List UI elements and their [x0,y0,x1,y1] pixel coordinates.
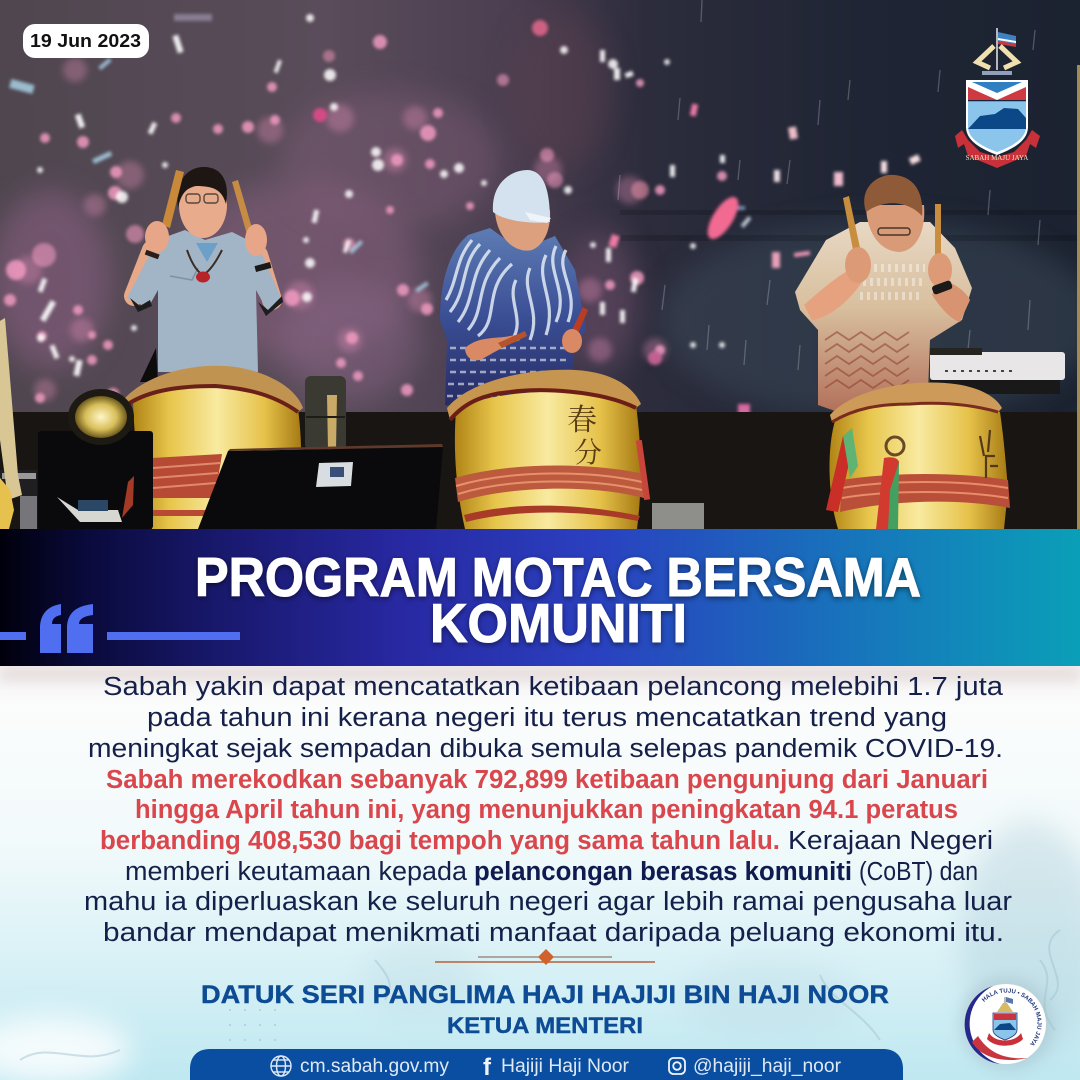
footer bar with contacts: Hajiji Haji Noor [501,1056,630,1077]
date badge: 19 Jun 2023 [30,30,141,51]
signatory name and title [201,981,889,1038]
icon: instagram [669,1058,685,1074]
body text: bandar mendapat menikmati manfaat daripada peluang ekonomi itu. [103,919,1004,947]
title: PROGRAM MOTAC BERSAMA [195,546,921,608]
body text [84,673,1013,947]
icon: Sabah coat of arms: SABAH MAJU JAYA [966,154,1028,162]
body text: Kerajaan Negeri [788,827,993,855]
photo: drum ceremony on stage [0,0,1080,529]
thin rain streaks on screen [617,0,1041,370]
arms [134,250,272,300]
date badge [23,24,149,58]
body text: mahu ia diperluaskan ke seluruh negeri agar lebih ramai pengusaha luar [84,888,1013,916]
body text: Sabah yakin dapat mencatatkan ketibaan pelancong melebihi 1.7 juta [103,673,1004,701]
laptop back [198,444,443,529]
icon: globe [271,1056,291,1076]
icon: Sabah coat of arms [955,28,1040,168]
guitar [0,318,37,529]
guitar case [305,376,346,450]
lower panel background with water splash [0,666,1080,1080]
title [195,546,921,654]
body text: pada tahun ini kerana negeri itu terus mencatatkan trend yang [147,704,947,732]
body text: memberi keutamaan kepada [125,858,468,886]
middle drum with characters: 春 [567,404,597,437]
right edge strip [1077,65,1080,529]
stage base [0,412,1080,529]
right man: batik shirt, head bowed [795,175,972,412]
highlighted statistics: hingga April tahun ini, yang menunjukkan peningkatan 94.1 peratus [135,796,958,824]
step block [652,503,704,529]
middle drum with characters: 分 [574,437,602,468]
stage light [38,389,153,529]
signatory name and title: DATUK SERI PANGLIMA HAJI HAJIJI BIN HAJI NOOR [201,981,889,1009]
footer bar with contacts: @hajiji_haji_noor [693,1056,842,1077]
ornamental divider [435,949,655,965]
title banner [0,529,1080,666]
highlighted statistics [100,766,988,855]
music stand [140,348,158,382]
body text: (CoBT) dan [859,858,978,886]
highlighted statistics: berbanding 408,530 bagi tempoh yang sama tahun lalu. [100,827,780,855]
middle man: blue batik and cap [440,170,588,410]
soft bokeh layer [14,58,667,401]
footer bar with contacts: cm.sabah.gov.my [300,1056,450,1077]
left drum [125,366,303,529]
icon: quotation mark [0,604,240,653]
title: KOMUNITI [430,592,687,654]
emblem: Hala Tuju seal [958,978,1052,1072]
body text: meningkat sejak sempadan dibuka semula selepas pandemik COVID-19. [88,735,1003,763]
signatory name and title: KETUA MENTERI [447,1013,643,1038]
body text: pelancongan berasas komuniti [474,858,852,886]
confetti bokeh [4,14,921,416]
highlighted statistics: Sabah merekodkan sebanyak 792,899 ketibaan pengunjung dari Januari [106,766,988,794]
middle drum with characters [447,370,650,529]
right drum with tassels [826,383,1010,529]
footer bar with contacts [190,1049,903,1080]
left man: grey shirt with drumsticks [127,167,283,372]
emblem: Hala Tuju seal: HALA TUJU • SABAH MAJU JAYA [982,988,1042,1046]
keyboard [930,348,1065,394]
